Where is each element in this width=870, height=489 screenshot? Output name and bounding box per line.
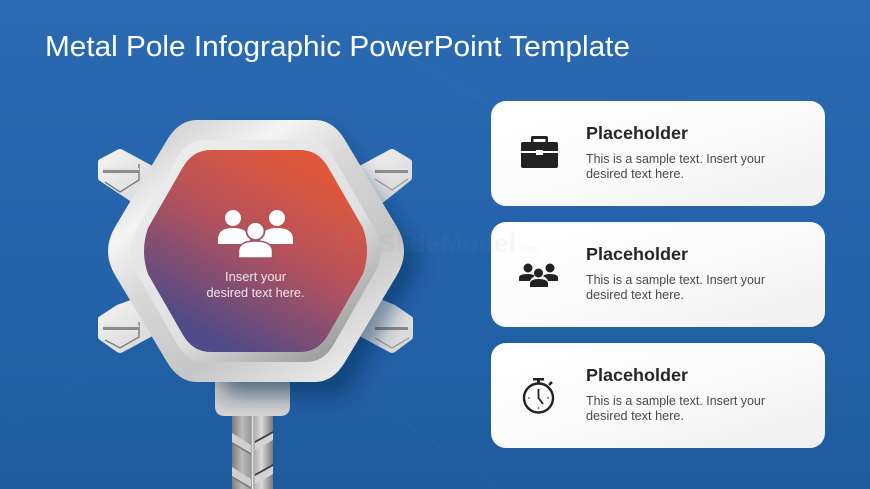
- bolt: bottom left: [98, 298, 160, 353]
- gradient hexagon face: [144, 150, 367, 352]
- body text: This is a sample text. Insert your: [586, 394, 765, 408]
- body text: This is a sample text. Insert your: [586, 152, 765, 166]
- inner bevel: [130, 140, 380, 362]
- body text: [586, 152, 765, 181]
- heading: Placeholder: [586, 244, 688, 264]
- hexagon caption: desired text here.: [206, 286, 304, 300]
- icon: briefcase: [521, 136, 558, 168]
- watermark: SlideModel: [378, 228, 516, 258]
- heading: Placeholder: [586, 365, 688, 385]
- bolt: top left: [98, 149, 160, 205]
- hexagon caption: [206, 270, 304, 300]
- panel: card 1: [491, 101, 825, 206]
- icon: stopwatch: [524, 378, 553, 412]
- body text: [586, 394, 765, 423]
- icon: team: [519, 264, 558, 287]
- pole shaft: [232, 410, 273, 489]
- pole clamp: [215, 378, 290, 416]
- bolt: top right: [352, 149, 412, 205]
- panel: card 2: [491, 222, 825, 327]
- heading: Placeholder: [586, 123, 688, 143]
- icon: team (white): [218, 210, 293, 258]
- metal pole assembly: [98, 120, 422, 489]
- body text: desired text here.: [586, 409, 684, 423]
- body text: This is a sample text. Insert your: [586, 273, 765, 287]
- title: Metal Pole Infographic PowerPoint Template: [45, 31, 630, 63]
- watermark: [338, 228, 538, 258]
- hexagon caption: Insert your: [225, 270, 286, 284]
- metal hexagon frame: [108, 120, 404, 382]
- watermark: .com: [518, 244, 538, 254]
- body text: desired text here.: [586, 288, 684, 302]
- panel: card 3: [491, 343, 825, 448]
- body text: [586, 273, 765, 302]
- hexagon drop shadow: [210, 135, 422, 396]
- bolt: bottom right: [352, 298, 413, 353]
- body text: desired text here.: [586, 167, 684, 181]
